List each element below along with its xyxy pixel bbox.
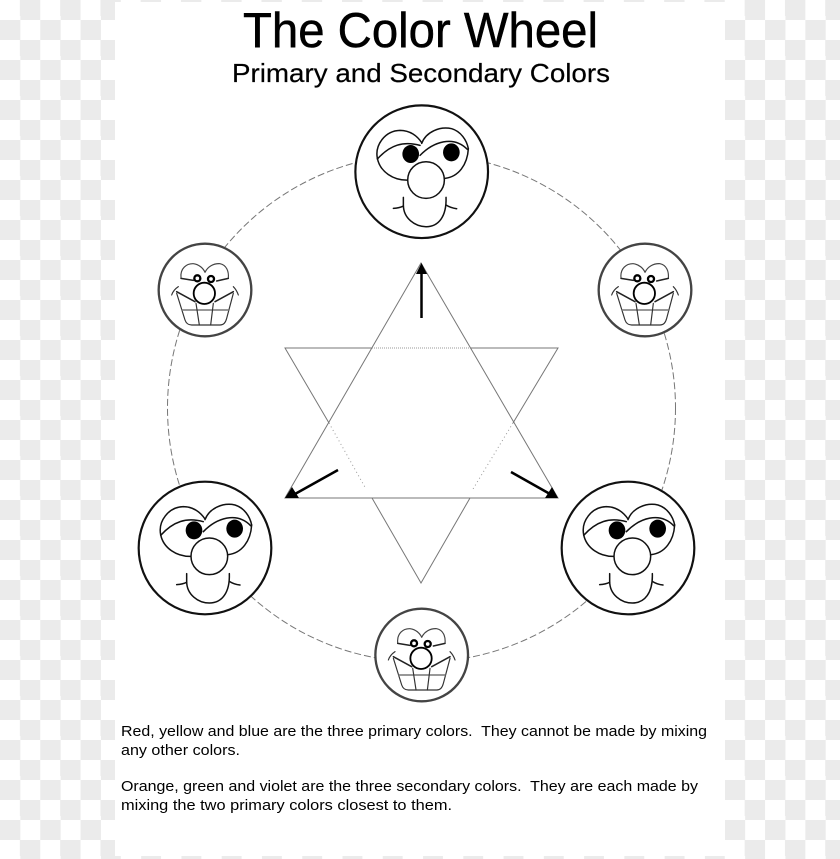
upward triangle <box>285 263 558 498</box>
six-pointed star <box>285 263 558 583</box>
secondary colors text <box>121 779 699 814</box>
secondary colors text: Orange, green and violet are the three secondary colors. They are each made by <box>121 779 699 795</box>
downward triangle <box>285 348 558 583</box>
white worksheet panel <box>115 2 725 856</box>
icon: right secondary cupcake face <box>599 244 691 336</box>
icon: lower right primary face <box>562 482 694 614</box>
icon: lower left primary face <box>139 482 271 614</box>
icon: bottom secondary cupcake face <box>375 609 468 701</box>
title: The Color Wheel <box>243 4 598 58</box>
secondary colors text: mixing the two primary colors closest to them. <box>121 798 452 814</box>
subtitle: Primary and Secondary Colors <box>232 58 610 88</box>
dashed wheel ring <box>168 154 676 662</box>
arrow: up to top primary <box>416 263 427 318</box>
icon: left secondary cupcake face <box>159 244 251 336</box>
primary colors text: any other colors. <box>121 743 240 759</box>
arrow: to lower right primary <box>511 472 558 498</box>
icon: top primary face <box>355 105 488 238</box>
arrow: to lower left primary <box>285 470 338 498</box>
primary colors text <box>121 724 707 759</box>
primary colors text: Red, yellow and blue are the three primary colors. They cannot be made by mixing <box>121 724 707 740</box>
